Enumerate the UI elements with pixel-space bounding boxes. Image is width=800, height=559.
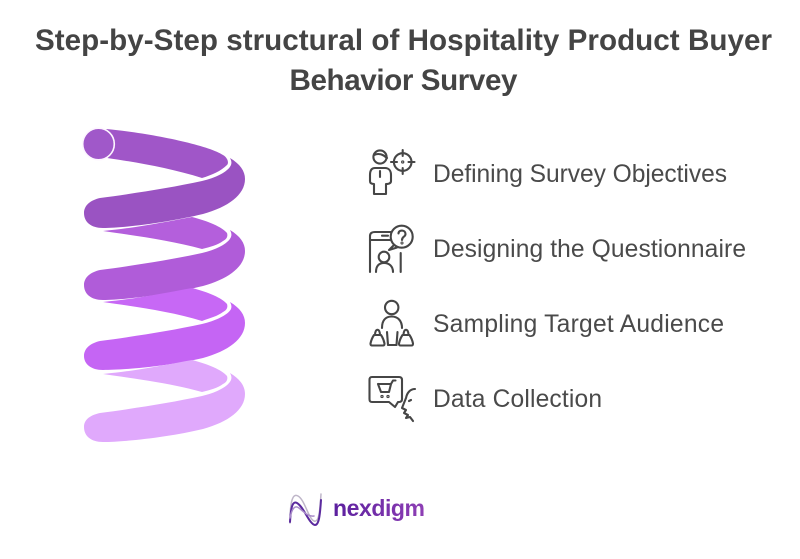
spiral back band 2 xyxy=(103,217,227,249)
title: Step-by-Step structural of Hospitality Product Buyer xyxy=(35,24,772,57)
spiral back band 4 xyxy=(103,360,227,392)
label: Sampling Target Audience: Sampling Target Audience xyxy=(433,311,724,338)
icon: shopping cart speech bubble with face xyxy=(370,377,415,421)
spiral front band 2 xyxy=(84,230,245,300)
icon: person with shopping bags xyxy=(370,301,413,346)
label: Defining Survey Objectives: Defining Survey Objectives xyxy=(433,161,727,188)
logo wordmark: nexdigm xyxy=(333,495,425,521)
spiral front band 3 xyxy=(84,302,245,370)
label: Data Collection: Data Collection xyxy=(433,386,602,413)
spiral back band 1 xyxy=(106,129,228,178)
icon: person with target xyxy=(370,150,414,194)
spiral start circle xyxy=(83,128,114,160)
title: Behavior Survey xyxy=(290,64,518,97)
spiral chart xyxy=(83,128,245,442)
label: Designing the Questionnaire: Designing the Questionnaire xyxy=(433,236,746,263)
title xyxy=(35,24,772,97)
spiral front band 4 xyxy=(84,373,245,442)
logo: nexdigm xyxy=(290,494,425,525)
icon: wave logo mark xyxy=(290,494,321,525)
spiral front band 1 xyxy=(84,158,245,228)
icon: questionnaire with question bubble xyxy=(370,226,413,272)
spiral back band 3 xyxy=(103,288,227,321)
